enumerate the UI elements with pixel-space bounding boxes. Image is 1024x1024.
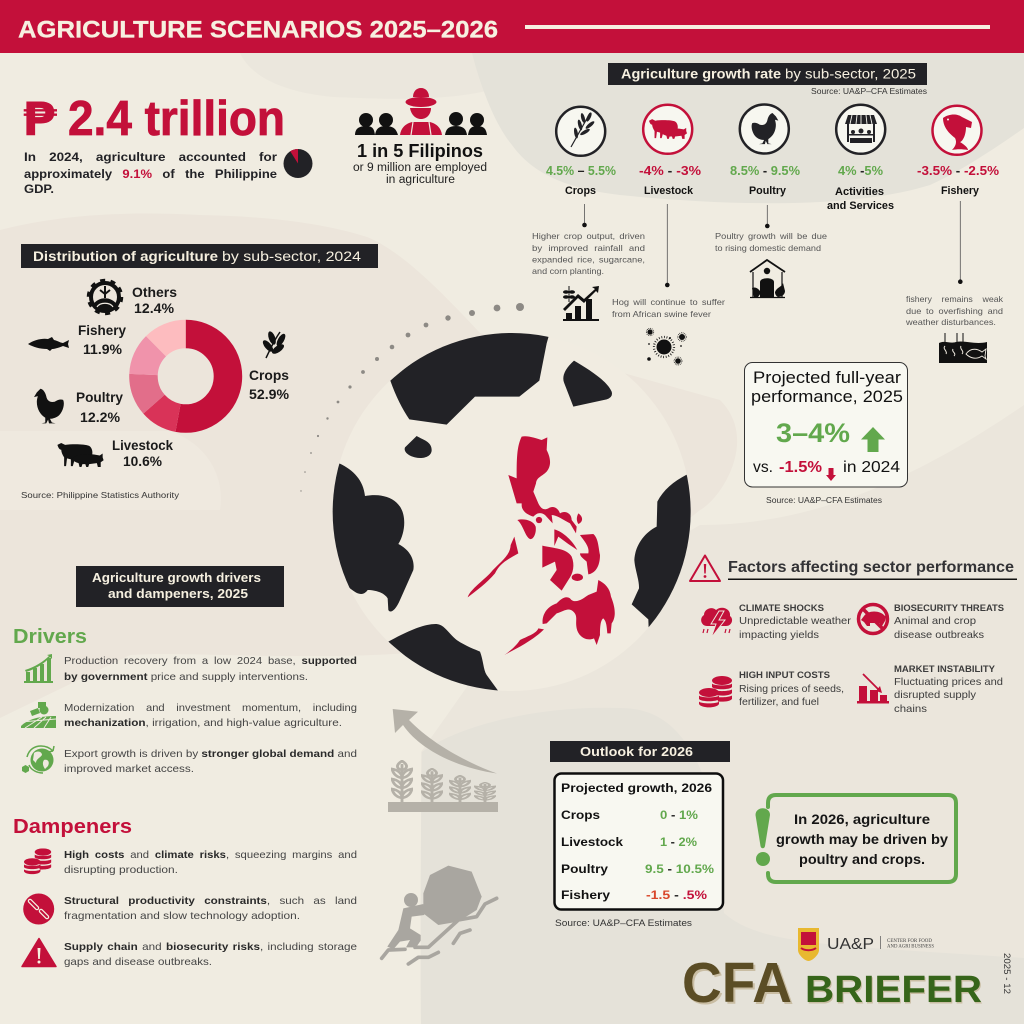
text [64,748,357,775]
donut labels: Fishery [78,322,126,338]
icon: storm [701,608,732,638]
text: Fluctuating prices and [894,676,1003,688]
land masses [329,332,694,693]
arrow: grey curved growth arrow [393,709,497,774]
connector [665,204,670,287]
icon: figure pushing boulder [382,866,497,964]
icon: falling chart [857,674,889,704]
description: crops: Higher crop output, driven [532,231,645,241]
section heading: dampeners: Dampeners [13,816,132,838]
comparison [753,459,900,476]
text: BIOSECURITY THREATS [894,603,1004,613]
text: fragmentation and slow technology adoption. [64,910,300,922]
text: mechanization , irrigation, and high-value agriculture. [64,717,342,729]
callout: In 2026, agriculture [794,811,930,827]
description: fishery: due to overfishing and [906,306,1003,316]
GDP stat block: 2.4 trillion [68,92,285,146]
text: Production recovery from a low 2024 base, supported [64,655,357,667]
icon: fishing hooks [939,333,987,363]
panel: outlook for 2026 [550,741,956,928]
description: poultry [715,231,827,253]
text: chains [894,703,927,715]
box heading: performance, 2025 [751,388,903,406]
panel: growth rate by sub-sector [532,63,1004,365]
text: by government price and supply interventions. [64,671,308,683]
employment stat [353,88,487,186]
icon: wheat row [388,761,498,812]
table: projected growth: Livestock [561,835,623,849]
icon: no pig [858,604,888,634]
section heading: drivers: Drivers [13,626,87,648]
text [64,941,357,968]
employment text: or 9 million are employed [353,162,487,174]
table: projected growth: 0 - 1% [660,808,698,822]
icon: growth chart [563,286,599,321]
heading: Agriculture growth drivers [92,571,261,585]
rate: activities: 4% -5% [838,163,883,178]
donut labels [76,284,290,469]
brand: CFA Briefer [682,951,983,1017]
heading: by sub-sector, 2024 [222,248,361,264]
label: activities and services: Activities [835,186,884,198]
icon: hen [34,388,64,424]
rate: fishery: -3.5% - -2.5% [917,163,999,178]
column: crops [532,107,645,321]
employment text [353,140,487,186]
heading [21,244,378,268]
icon: farmer and people [355,88,487,135]
donut chart [143,334,228,419]
text: MARKET INSTABILITY [894,664,995,674]
map: Philippines [468,436,615,655]
icon: coins [24,848,52,874]
donut labels: Crops [249,367,289,383]
icon: bar chart [24,654,53,683]
icon: livestock [643,105,692,154]
panel: factors affecting performance [690,556,1017,715]
arrow: down [826,468,836,481]
panel: drivers and dampeners [13,566,357,968]
text [64,849,357,876]
donut labels: 52.9% [249,386,290,402]
icon: market stall [836,105,885,154]
table: projected growth: Poultry [561,862,608,876]
source note: Source: Philippine Statistics Authority [21,490,180,500]
logo: UA&P shield: UA&P [827,936,874,953]
description: poultry: to rising domestic demand [715,243,821,253]
label: activities and services: and Services [827,200,894,212]
label: crops: Crops [565,185,596,197]
icon: crops [556,107,605,156]
text: Animal and crop [894,615,976,627]
employment text: 1 in 5 Filipinos [357,140,483,161]
logo: UA&P shield [798,928,934,961]
icon: gear farm [88,280,122,314]
heading [550,741,730,762]
heading: and dampeners, 2025 [108,587,248,601]
text: disrupted supply [894,689,977,701]
title: AGRICULTURE SCENARIOS 2025–2026 [18,16,498,44]
brand: CFA Briefer: CFA [684,953,794,1017]
brand: CFA Briefer: BRIEFER [806,970,983,1012]
description: crops: and corn planting. [532,266,604,276]
brand: CFA Briefer: CFA [682,951,792,1015]
table: projected growth: Fishery [561,888,610,902]
text: Unpredictable weather [739,615,852,627]
heading: Factors affecting sector performance [728,559,1014,576]
icon: crops sprig [261,330,287,358]
heading: Outlook for 2026 [580,744,693,759]
factor: biosecurity threats [858,603,1004,641]
GDP paragraph: approximately 9.1% of the Philippine [24,169,277,181]
column: fishery [905,106,1004,363]
donut labels: 11.9% [83,341,123,357]
icon: warning triangle [22,938,56,966]
description: fishery [905,294,1004,327]
donut labels: Poultry [76,389,123,405]
rate: livestock: -4% - -3% [639,163,701,178]
heading: by sub-sector, 2025 [785,66,916,82]
table: projected growth: 9.5 - 10.5% [645,862,714,876]
panel: distribution by sub-sector [21,244,378,500]
donut labels: 12.2% [80,409,121,425]
text [739,603,852,641]
icon: virus [646,328,686,365]
text: gaps and disease outbreaks. [64,956,212,968]
icon: fish [28,337,69,351]
GDP stat block [22,92,312,196]
table: projected growth: Crops [561,808,600,822]
text [739,670,844,708]
icon: fishery [932,106,982,155]
icon: poultry [740,104,789,154]
dampener: supply chain [22,938,357,968]
description: crops [532,231,645,276]
logo: UA&P shield: CENTER FOR FOOD [887,939,932,944]
connector [958,201,963,284]
box heading: Projected full-year [753,369,902,387]
text: impacting yields [739,629,819,641]
GDP paragraph: In 2024, agriculture accounted for [24,152,278,164]
description: fishery: fishery remains weak [906,294,1004,304]
icon: cow and pig [58,443,104,467]
rate: crops: 4.5% – 5.5% [546,163,616,178]
label: fishery: Fishery [941,185,980,197]
big value: 3–4% [776,418,850,448]
text: High costs and climate risks , squeezing margins and [64,849,357,861]
text: HIGH INPUT COSTS [739,670,830,680]
header bar [0,0,1024,53]
donut labels: 10.6% [123,453,163,469]
table: projected growth: -1.5 - .5% [646,888,707,902]
text: CLIMATE SHOCKS [739,603,824,613]
description: livestock: Hog will continue to suffer [612,297,725,307]
GDP paragraph: GDP. [24,184,54,196]
brand: CFA Briefer: BRIEFER [805,969,982,1011]
factor: climate shocks [701,603,852,641]
source note: Source: UA&P–CFA Estimates [766,496,882,505]
donut labels: Livestock [112,437,173,453]
logo: UA&P shield: AND AGRI BUSINESS [887,944,934,950]
label: activities and services [827,186,894,212]
donut labels: Others [132,284,177,300]
source note: Source: UA&P–CFA Estimates [555,918,693,928]
peso value: ₱ [22,92,57,146]
column: poultry [715,104,827,298]
text: disrupting production. [64,864,178,876]
text: Rising prices of seeds, [739,683,844,695]
description: poultry: Poultry growth will be due [715,231,827,241]
label: livestock: Livestock [644,185,694,197]
employment text: in agriculture [386,174,455,186]
text [894,664,1003,715]
description: livestock [612,297,725,319]
pie: 9.1 percent [284,149,312,178]
icon: broken chain [23,894,54,924]
table: projected growth: Projected growth, 2026 [561,781,712,795]
label: poultry: Poultry [749,185,787,197]
text: fertilizer, and fuel [739,696,819,708]
text: Structural productivity constraints , such as land [64,895,357,907]
driver: export growth [22,746,357,775]
heading [608,63,927,85]
panel: projected full-year performance [744,362,908,487]
description: livestock: from African swine fever [612,309,711,319]
column: activities and services [827,105,894,212]
arrow: up [861,427,885,452]
text: Export growth is driven by stronger global demand and [64,748,357,760]
table: projected growth: 1 - 2% [660,835,697,849]
callout: poultry and crops. [799,851,925,867]
box heading [751,369,903,406]
globe with Philippines map [329,332,694,693]
dampener: structural constraints [23,894,357,924]
text [64,702,357,729]
description: fishery: weather disturbances. [905,317,996,327]
text: disease outbreaks [894,629,984,641]
icon: poultry house [750,260,785,298]
source note: Source: UA&P–CFA Estimates [811,87,927,96]
icon: warning [690,556,720,581]
GDP paragraph [24,152,278,196]
text [894,603,1004,641]
comparison: vs. [753,459,773,476]
comparison: in 2024 [843,459,900,476]
driver: modernization [21,702,357,729]
heading: Distribution of agriculture [33,248,218,264]
column: livestock [612,105,725,365]
heading: Agriculture growth rate [621,66,781,82]
connector [582,204,587,227]
text: Modernization and investment momentum, including [64,702,357,714]
donut labels: 12.4% [134,300,175,316]
connector [765,205,770,228]
factor: market instability [857,664,1003,715]
text: Supply chain and biosecurity risks , including storage [64,941,357,953]
table: projected growth [554,774,723,910]
callout: growth may be driven by [776,831,948,847]
icon: tractor field [21,702,56,728]
factor: high input costs [699,670,844,708]
text [64,895,357,922]
dampener: high costs [24,848,357,876]
driver: production recovery [24,654,357,683]
text: improved market access. [64,763,194,775]
callout [756,795,956,882]
dotted arc [300,303,524,492]
text [64,655,357,683]
comparison: -1.5% [779,459,822,476]
description: crops: expanded rice, sugarcane, [532,254,645,264]
icon: coins [699,676,732,708]
issue number: 2025 - 12 [1001,953,1012,994]
description: crops: by improved rainfall and [532,243,645,253]
rate: poultry: 8.5% - 9.5% [730,163,800,178]
heading [76,566,284,607]
icon: globe export [22,746,54,773]
